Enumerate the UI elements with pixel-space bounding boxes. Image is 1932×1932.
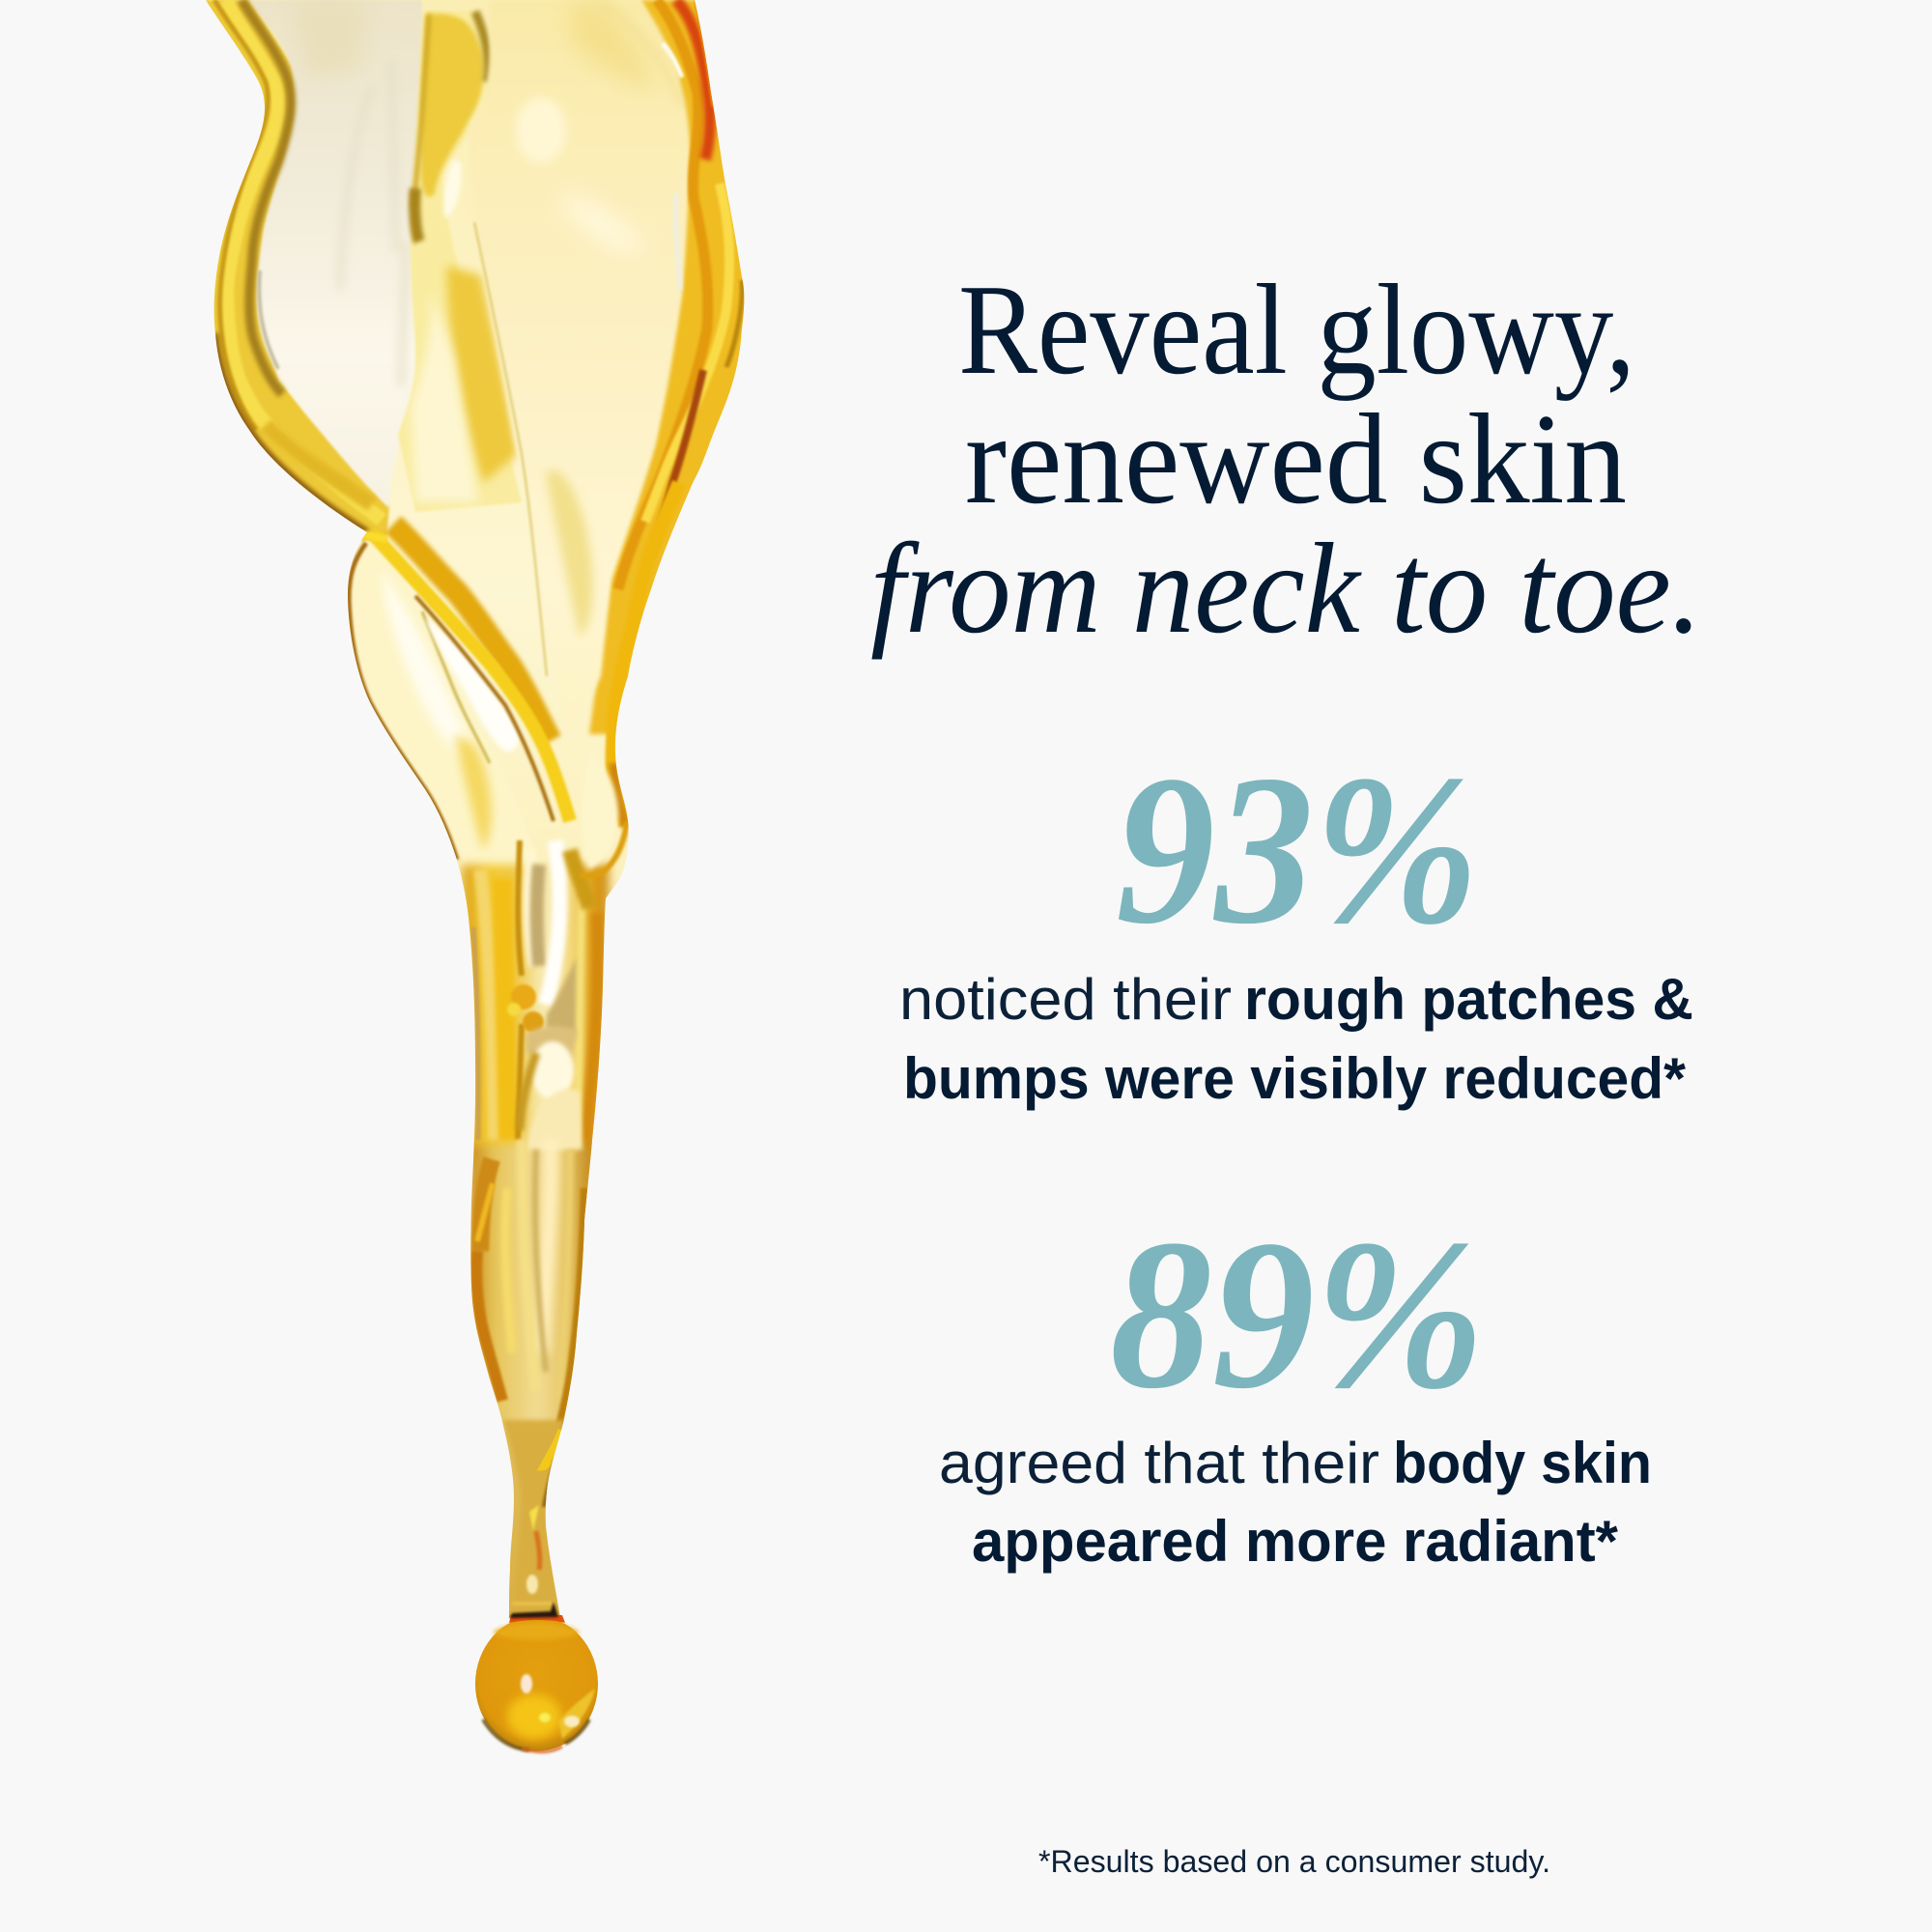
- left rim base: [198, 0, 389, 541]
- stat: 89%: 89%: [1110, 1196, 1485, 1434]
- trunk beads and bubble: [511, 984, 536, 1009]
- stat text: body skin: appeared more radiant*: [972, 1509, 1619, 1574]
- stat text: body skin: agreed that their: [939, 1431, 1379, 1495]
- title: Reveal glowy,: [958, 258, 1635, 401]
- neck highlights: [529, 1505, 539, 1531]
- footnote: *Results based on a consumer study.: [1038, 1844, 1550, 1879]
- right rim base: [589, 0, 753, 734]
- trunk underlay: [462, 865, 609, 1154]
- oil stream: [193, 0, 773, 1642]
- stat text: rough patches: rough patches &: [1244, 967, 1693, 1032]
- right rim stripes: [618, 0, 708, 589]
- stat text: rough patches: noticed their: [899, 967, 1232, 1032]
- illustration: golden oil drip: [193, 0, 773, 1752]
- upper-right knot: [582, 753, 618, 869]
- stat text: rough patches: [899, 967, 1693, 1111]
- stat text: body skin: body skin: [1393, 1431, 1652, 1495]
- centre ribbon: [398, 11, 522, 512]
- upper right pale lobe: [469, 0, 689, 734]
- tail underlay: [469, 1145, 594, 1430]
- title: [870, 258, 1702, 660]
- upper left clear lobe: [248, 0, 422, 508]
- title: renewed skin: [965, 387, 1627, 530]
- left rim stripes: [226, 0, 382, 520]
- stat text: rough patches: bumps were visibly reduced*: [903, 1046, 1687, 1111]
- crossing gold band: [393, 525, 551, 741]
- lower left lobe: [352, 540, 515, 859]
- lobe streaks: [336, 191, 410, 386]
- title: from neck to toe.: [870, 517, 1702, 660]
- oil droplet: [475, 1602, 598, 1752]
- trunk stripes: [480, 869, 495, 1140]
- stat text: body skin: [939, 1431, 1652, 1574]
- stat: 93%: 93%: [1116, 731, 1479, 969]
- tail stripes: [541, 1140, 552, 1352]
